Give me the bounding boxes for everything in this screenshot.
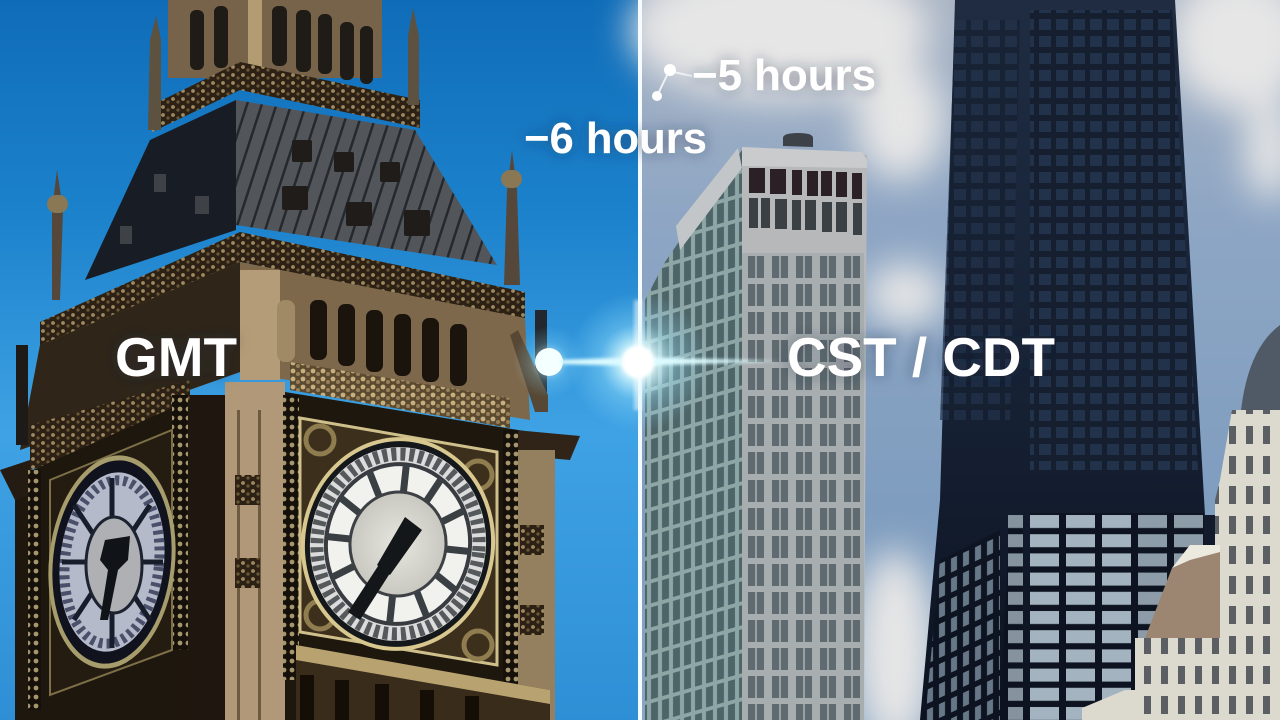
illustration: Big Ben clock tower — [0, 0, 580, 720]
connector: glowing link between time zones — [513, 292, 780, 432]
slate roof — [85, 100, 497, 280]
icon: small node connector — [652, 64, 692, 101]
label: minus six hours: −6 hours — [524, 114, 707, 163]
front facade — [742, 150, 867, 720]
panel: Chicago sky background — [630, 0, 1280, 720]
illustration: white high-rise — [645, 133, 867, 720]
icon: side clock face — [38, 430, 186, 695]
divider line — [638, 0, 642, 720]
left facade — [645, 150, 745, 720]
label: CST / CDT: CST / CDT — [787, 326, 1055, 388]
illustration: dark skyscraper — [920, 0, 1217, 720]
label: GMT: GMT — [115, 326, 237, 388]
icon: main clock face — [290, 418, 506, 665]
illustration: classical buildings — [1082, 325, 1280, 720]
tower shaft — [0, 310, 580, 720]
upper belfry — [148, 0, 420, 132]
pinnacles — [47, 150, 522, 300]
label: minus five hours: −5 hours — [692, 51, 876, 100]
panel: London sky background — [0, 0, 639, 720]
cornice and lantern gallery — [20, 232, 530, 470]
